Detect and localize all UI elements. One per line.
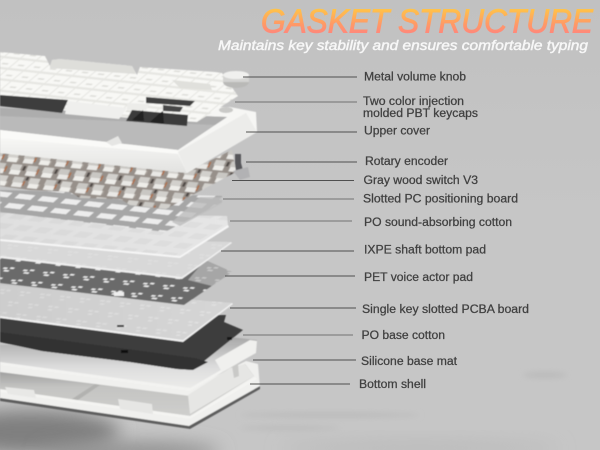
callout: slotted PC positioning board: Slotted PC positioning board	[363, 194, 518, 206]
exploded keyboard illustration	[0, 52, 260, 429]
callout: IXPE shaft bottom pad: IXPE shaft bottom pad	[364, 244, 486, 256]
callout: PO base cotton: PO base cotton	[362, 330, 445, 342]
two color injection keycaps	[0, 52, 238, 126]
metal volume knob	[223, 71, 249, 88]
callout: metal volume knob: Metal volume knob	[364, 72, 466, 84]
callout: PET voice actor pad: PET voice actor pad	[364, 272, 473, 284]
bottom shell	[0, 361, 260, 429]
slotted PC positioning board	[0, 190, 222, 232]
rotary encoder	[233, 154, 250, 180]
gray wood switches	[0, 150, 236, 209]
callout: keycaps	[235, 96, 478, 120]
subtitle: Maintains key stability and ensures comfortable typing	[218, 38, 589, 53]
IXPE shaft bottom pad	[0, 237, 232, 279]
callout: gray wood switch: Gray wood switch V3	[364, 175, 478, 187]
callout: PO sound-absorbing cotton: PO sound-absorbing cotton	[364, 217, 512, 229]
callout: silicone base mat: Silicone base mat	[361, 356, 458, 368]
callout: keycaps: Two color injection	[363, 96, 464, 108]
single key slotted PCBA board	[0, 285, 233, 342]
callout: upper cover: Upper cover	[364, 126, 430, 138]
upper cover	[0, 107, 257, 173]
callout: single key slotted PCBA board: Single key slotted PCBA board	[362, 304, 529, 316]
callout: rotary encoder: Rotary encoder	[365, 156, 448, 168]
PET voice actor pad	[0, 257, 232, 305]
callout: bottom shell: Bottom shell	[359, 379, 426, 391]
PO base cotton	[0, 315, 243, 370]
PO sound-absorbing cotton	[0, 213, 229, 258]
silicone base mat	[0, 337, 257, 391]
callout: keycaps: molded PBT keycaps	[363, 108, 478, 120]
